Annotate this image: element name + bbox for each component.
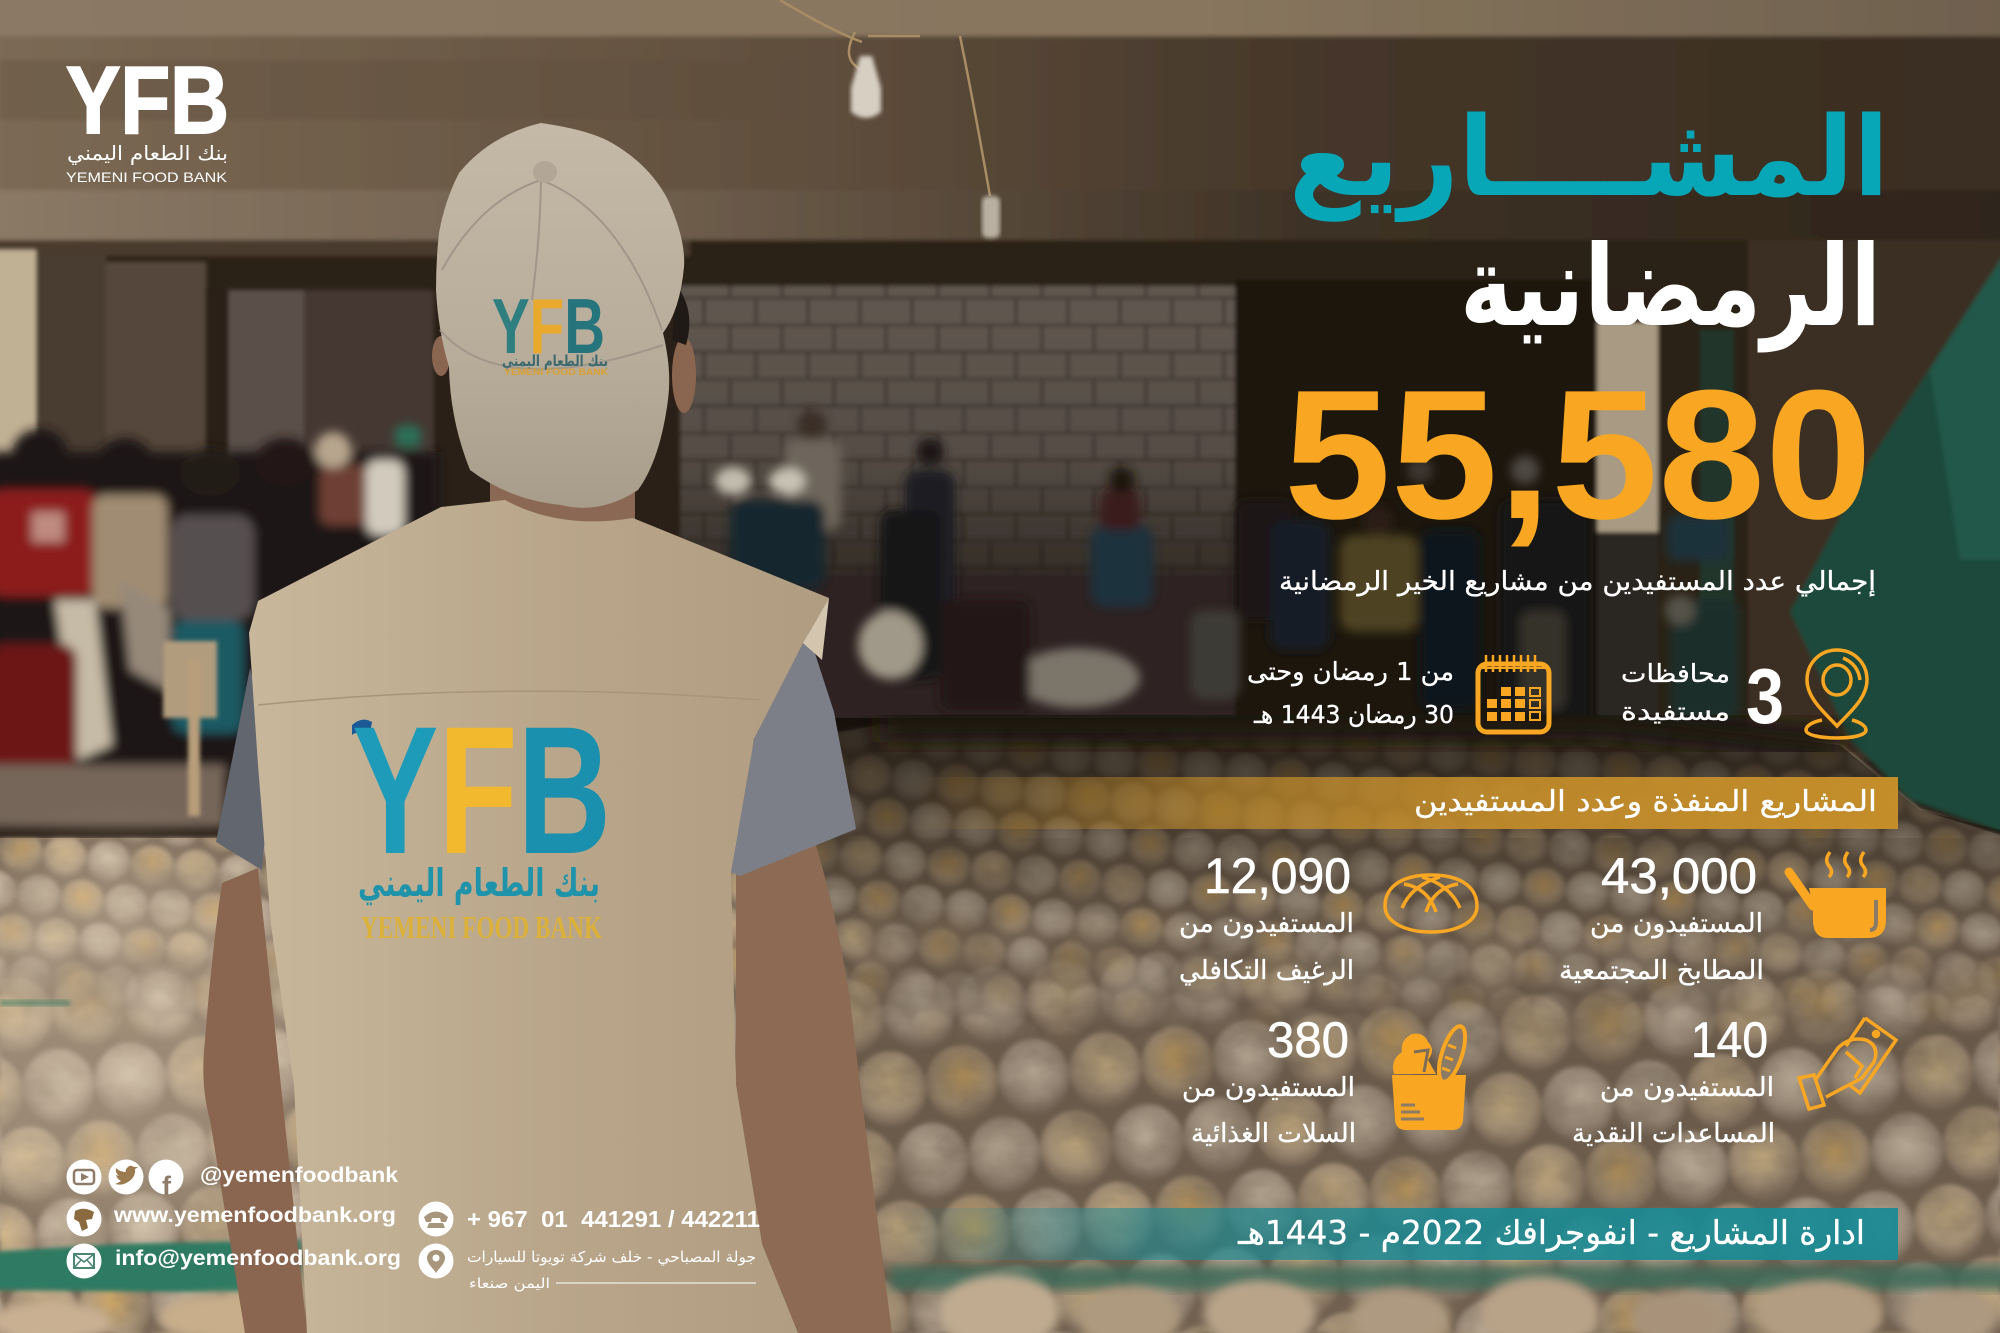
big number: 55,580 xyxy=(1284,351,1872,557)
governorates label line 1: محافظات xyxy=(1621,659,1730,688)
icon: facebook: f xyxy=(162,1171,172,1201)
label line 1: المستفيدون من xyxy=(1179,909,1354,939)
website: www.yemenfoodbank.org xyxy=(113,1204,396,1227)
left sleeve xyxy=(216,668,272,870)
logo wordmark: YFB xyxy=(66,47,229,154)
icon: location xyxy=(418,1244,454,1278)
footer bar: projects department xyxy=(895,1208,1898,1260)
icon: map pin xyxy=(1806,650,1867,738)
subtitle: إجمالي عدد المستفيدين من مشاريع الخير الرمضانية xyxy=(1279,567,1876,597)
icon: steaming pot xyxy=(1789,852,1886,938)
vest logo english name: YEMENI FOOD BANK xyxy=(361,909,602,945)
icon: calendar xyxy=(1478,655,1549,732)
label line 1: المستفيدون من xyxy=(1590,909,1763,939)
icon: hand holding cash xyxy=(1799,1018,1896,1109)
governorates label line 2: مستفيدة xyxy=(1621,697,1730,726)
icon: bread xyxy=(1385,875,1477,932)
vest logo arabic name: بنك الطعام اليمني xyxy=(358,861,600,906)
period line 1: من 1 رمضان وحتى xyxy=(1247,657,1454,687)
icon: youtube xyxy=(66,1160,102,1194)
social handle: @yemenfoodbank xyxy=(200,1164,398,1187)
address line 1: جولة المصباحي - خلف شركة تويوتا للسيارات xyxy=(467,1248,756,1267)
label line 2: الرغيف التكافلي xyxy=(1179,956,1354,986)
title line 2: الرمضانية xyxy=(1460,222,1881,352)
icon: facebook xyxy=(148,1160,184,1201)
right sleeve xyxy=(731,632,856,876)
icon: mail xyxy=(66,1244,102,1278)
footer bar text: ادارة المشاريع - انفوجرافك 2022م - 1443هـ xyxy=(1237,1213,1865,1252)
left arm xyxy=(203,868,307,1333)
number 3: 3 xyxy=(1746,652,1784,740)
stat: cash assistance xyxy=(1572,1012,1896,1149)
section bar: projects and beneficiaries xyxy=(915,777,1898,829)
neck xyxy=(490,470,635,530)
value 12,090: 12,090 xyxy=(1204,848,1351,904)
stat: food baskets xyxy=(1182,1012,1470,1149)
icon: twitter xyxy=(108,1160,144,1194)
label line 2: المساعدات النقدية xyxy=(1572,1119,1775,1149)
contact block xyxy=(66,1160,760,1292)
vest xyxy=(249,500,829,1333)
value 140: 140 xyxy=(1691,1012,1768,1068)
cap logo arabic: بنك الطعام اليمني xyxy=(502,352,608,370)
cap xyxy=(436,123,684,508)
label line 1: المستفيدون من xyxy=(1600,1073,1774,1103)
title line 1: المشــــاريع xyxy=(1289,93,1889,222)
stat: governorates xyxy=(1621,650,1867,740)
cap logo: YFB xyxy=(492,282,605,370)
logo: YFB xyxy=(66,47,229,185)
section bar title: المشاريع المنفذة وعدد المستفيدين xyxy=(1414,784,1877,818)
icon: globe xyxy=(66,1202,102,1236)
stat: period xyxy=(1247,655,1549,732)
email: info@yemenfoodbank.org xyxy=(115,1247,401,1270)
phone number: + 967 01 441291 / 442211 xyxy=(467,1206,760,1232)
period line 2: 30 رمضان 1443 هـ xyxy=(1253,700,1454,729)
person from behind wearing YFB cap and vest xyxy=(203,123,892,1333)
value 43,000: 43,000 xyxy=(1601,848,1757,904)
icon: phone xyxy=(418,1202,454,1236)
logo arabic name: بنك الطعام اليمني xyxy=(67,141,228,166)
label line 2: السلات الغذائية xyxy=(1191,1119,1356,1149)
right arm xyxy=(736,845,892,1333)
cap logo english: YEMENI FOOD BANK xyxy=(504,367,609,377)
ears and hair xyxy=(672,337,696,413)
logo english name: YEMENI FOOD BANK xyxy=(66,169,228,185)
icon: grocery bag xyxy=(1392,1023,1470,1130)
value 380: 380 xyxy=(1267,1012,1349,1068)
label line 1: المستفيدون من xyxy=(1182,1073,1355,1103)
stat: community kitchens xyxy=(1559,848,1886,986)
label line 2: المطابخ المجتمعية xyxy=(1559,956,1764,986)
stat: solidarity bread xyxy=(1179,848,1477,986)
vest logo: YFB xyxy=(352,688,611,892)
address line 2: اليمن صنعاء xyxy=(469,1276,550,1292)
